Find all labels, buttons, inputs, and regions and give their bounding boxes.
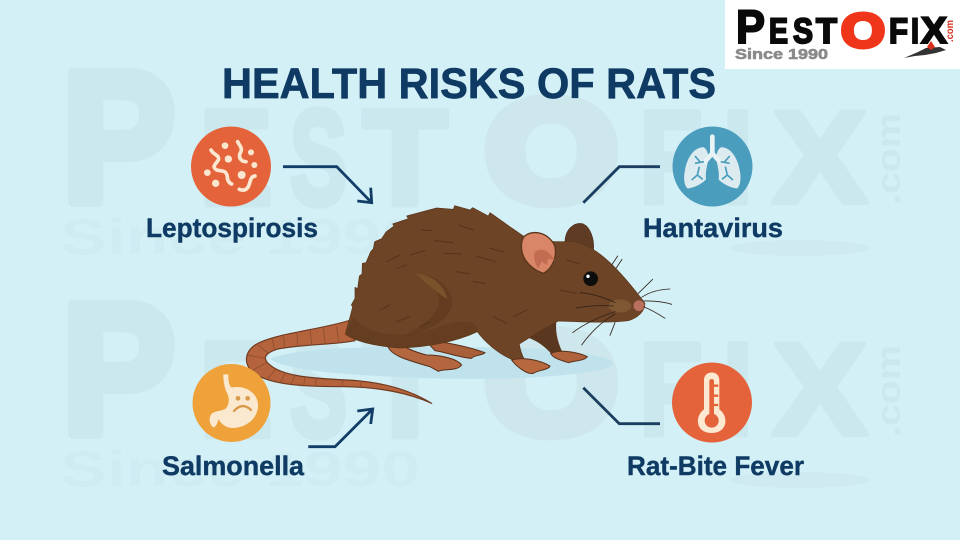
rat lower body shading bbox=[345, 317, 478, 348]
watermark: lower brand mark: T bbox=[363, 314, 447, 465]
rat far front leg bbox=[527, 318, 563, 354]
rat shadow bbox=[270, 347, 613, 379]
logo: Pestofix Since 1990: .com bbox=[945, 20, 956, 42]
logo: Pestofix Since 1990: O bbox=[841, 5, 885, 58]
icon: stomach bbox=[192, 364, 270, 442]
watermark: lower brand mark: F bbox=[640, 316, 702, 462]
rat body bbox=[345, 206, 645, 360]
icon: bacteria bbox=[191, 126, 271, 206]
watermark: upper brand mark bbox=[60, 35, 908, 265]
rat near foot bbox=[512, 359, 550, 374]
logo: Pestofix Since 1990 bbox=[725, 0, 960, 69]
label: Hantavirus: Hantavirus bbox=[643, 213, 783, 243]
watermark: upper brand mark: I bbox=[723, 84, 752, 230]
rat tail bbox=[246, 320, 432, 403]
icon: lungs bbox=[672, 126, 752, 206]
panel: Salmonella bbox=[162, 364, 373, 481]
logo: Pestofix Since 1990: S bbox=[793, 12, 813, 51]
watermark: lower brand mark: X bbox=[773, 316, 867, 462]
watermark: upper brand mark: S bbox=[290, 82, 347, 233]
logo: Pestofix Since 1990: E bbox=[769, 12, 788, 51]
watermark: upper brand mark: P bbox=[62, 35, 175, 241]
watermark: lower brand mark: P bbox=[62, 267, 175, 473]
panel: Leptospirosis bbox=[146, 126, 372, 243]
watermark: upper brand mark: .com bbox=[870, 113, 908, 205]
watermark: lower brand mark: O bbox=[486, 304, 617, 463]
watermark: upper brand mark: T bbox=[363, 82, 447, 233]
rat ear bbox=[521, 233, 555, 273]
watermark: upper brand mark: O bbox=[486, 72, 617, 231]
rat eye bbox=[583, 271, 598, 286]
rat hind foot bbox=[387, 342, 462, 371]
watermark: lower brand mark: Since 1990 bbox=[60, 441, 420, 497]
rat fur marks bbox=[380, 225, 580, 327]
logo: Pestofix Since 1990: F bbox=[889, 12, 908, 51]
watermark: lower brand mark bbox=[60, 267, 908, 497]
watermark: upper brand mark: F bbox=[640, 84, 702, 230]
arrow: Leptospirosis to rat bbox=[283, 167, 372, 203]
far ear bbox=[565, 224, 594, 251]
logo: Pestofix Since 1990: P bbox=[736, 0, 765, 53]
watermark: upper brand mark: Since 1990 bbox=[60, 209, 420, 265]
rat whiskers bbox=[573, 256, 672, 345]
rat far hind foot bbox=[425, 340, 485, 358]
rat haunch shading bbox=[403, 273, 452, 337]
watermark: upper brand mark: X bbox=[773, 84, 867, 230]
watermark: lower brand mark: S bbox=[290, 314, 347, 465]
panel: Hantavirus bbox=[583, 126, 783, 243]
label: Rat-Bite Fever: Rat-Bite Fever bbox=[627, 451, 804, 481]
label: Leptospirosis: Leptospirosis bbox=[146, 213, 318, 243]
rat nose bbox=[633, 300, 645, 311]
label: Salmonella: Salmonella bbox=[162, 451, 305, 481]
watermark: lower brand mark: I bbox=[723, 316, 752, 462]
watermark: lower brand mark: E bbox=[200, 314, 272, 465]
logo: Pestofix Since 1990: T bbox=[816, 12, 837, 51]
logo: Pestofix Since 1990: I bbox=[911, 12, 919, 51]
watermark: lower brand mark: .com bbox=[870, 345, 908, 437]
rat illustration bbox=[246, 206, 672, 403]
arrow: Salmonella to rat bbox=[308, 409, 373, 447]
title: HEALTH RISKS OF RATS bbox=[222, 60, 716, 108]
watermark: upper brand mark: E bbox=[200, 82, 272, 233]
panel: Rat-Bite Fever bbox=[583, 362, 804, 481]
logo: Pestofix Since 1990: Since 1990 bbox=[735, 46, 828, 63]
rat snout highlight bbox=[609, 299, 631, 313]
arrow: Rat-Bite Fever line bbox=[583, 388, 660, 424]
arrow: Hantavirus line bbox=[583, 167, 660, 203]
logo: Pestofix Since 1990: X bbox=[921, 10, 947, 51]
icon: thermometer bbox=[672, 362, 752, 442]
